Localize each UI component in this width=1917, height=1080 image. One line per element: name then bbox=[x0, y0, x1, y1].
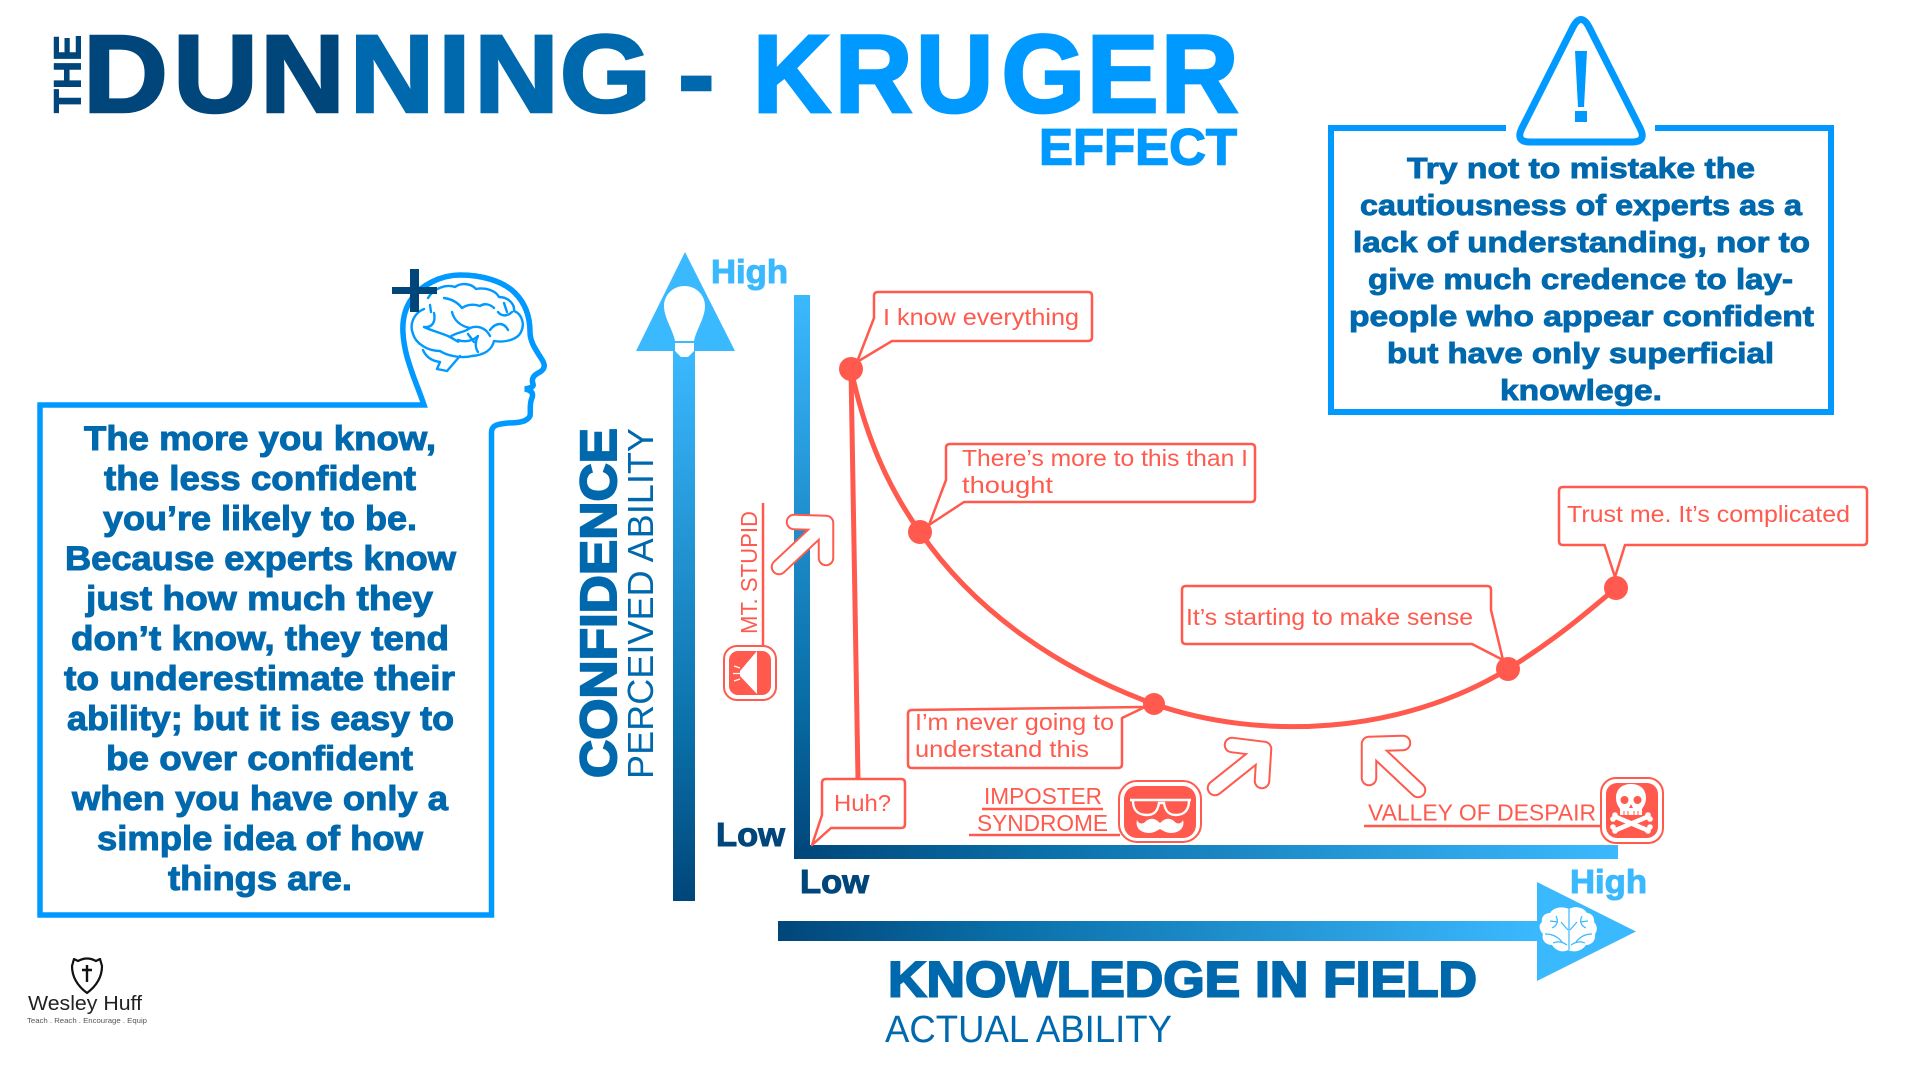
panel: warning note bbox=[1331, 20, 1831, 412]
title: DUNNING: DUN bbox=[83, 14, 345, 136]
icon: light bulb bbox=[664, 286, 705, 357]
label: IMPOSTER SYNDROME: IMPOSTER bbox=[984, 783, 1102, 809]
text: know less confident: be over confident bbox=[106, 740, 413, 778]
arrow: toward imposter syndrome bbox=[1215, 745, 1264, 788]
icon: megaphone bbox=[724, 646, 776, 700]
point: never going to understand bbox=[1143, 693, 1165, 715]
text: know less confident: things are. bbox=[168, 860, 352, 898]
icon: shield with cross bbox=[72, 958, 102, 993]
text: know less confident: you’re likely to be. bbox=[103, 500, 417, 538]
chart: Dunning-Kruger curve bbox=[724, 292, 1867, 859]
text: know less confident: ability; but it is easy to bbox=[67, 700, 454, 738]
icon: glasses and moustache bbox=[1119, 781, 1201, 842]
callout: never going to understand bbox=[908, 707, 1145, 768]
callout: Huh? bbox=[812, 779, 905, 845]
title: THE: THE bbox=[48, 35, 90, 113]
callout: There's more to this: thought bbox=[962, 472, 1054, 498]
callout: starting to make sense: It’s starting to make sense bbox=[1186, 604, 1473, 630]
title: EFFECT: EFFECT bbox=[1039, 118, 1237, 176]
text: warning message: Try not to mistake the bbox=[1407, 153, 1755, 185]
heading: CONFIDENCE: CONFIDENCE bbox=[570, 428, 627, 778]
text: know less confident: Because experts know bbox=[65, 540, 457, 578]
x-axis knowledge arrow bbox=[778, 882, 1636, 981]
callout: Trust me bbox=[1559, 487, 1867, 577]
callout: I know everything: I know everything bbox=[883, 304, 1079, 330]
subheading: PERCEIVED ABILITY: PERCEIVED ABILITY bbox=[620, 428, 661, 779]
label: High confidence: High bbox=[711, 253, 788, 290]
title: KRUGER: KRUGER bbox=[753, 13, 1239, 136]
point: starting to make sense bbox=[1496, 657, 1520, 681]
chart axis: vertical bbox=[794, 295, 810, 859]
text: warning message: but have only superficial bbox=[1387, 338, 1774, 370]
panel: head-shaped knowledge box bbox=[40, 269, 544, 915]
logo tagline: Teach . Reach . Encourage . Equip bbox=[27, 1016, 147, 1025]
text: know less confident: when you have only a bbox=[71, 780, 449, 818]
chart axis: horizontal bbox=[794, 845, 1618, 859]
heading: KNOWLEDGE IN FIELD: KNOWLEDGE IN FIELD bbox=[888, 952, 1477, 1008]
point: decline bbox=[908, 520, 932, 544]
callout: I know everything bbox=[857, 292, 1092, 362]
point: peak bbox=[839, 357, 863, 381]
text: know less confident: The more you know, bbox=[84, 420, 436, 458]
title: dash: - bbox=[678, 13, 715, 136]
panel outline with head silhouette bbox=[40, 275, 544, 915]
text: know less confident: the less confident bbox=[104, 460, 416, 498]
callout: starting to make sense bbox=[1182, 586, 1503, 660]
label: High knowledge: High bbox=[1570, 863, 1647, 900]
label: Low knowledge: Low bbox=[800, 863, 869, 900]
text: know less confident: simple idea of how bbox=[97, 820, 424, 858]
callout: never going to understand: understand this bbox=[915, 736, 1089, 762]
subheading: ACTUAL ABILITY: ACTUAL ABILITY bbox=[885, 1009, 1172, 1051]
label: IMPOSTER SYNDROME: SYNDROME bbox=[977, 810, 1108, 836]
label: VALLEY OF DESPAIR: VALLEY OF DESPAIR bbox=[1368, 800, 1596, 826]
text: warning message bbox=[1349, 153, 1814, 407]
arrow head bbox=[636, 252, 735, 351]
text: warning message: lack of understanding, nor to bbox=[1353, 227, 1810, 259]
warning box outline bbox=[1331, 128, 1831, 412]
arrow shaft bbox=[778, 921, 1538, 941]
label: MT. STUPID: MT. STUPID bbox=[736, 511, 762, 634]
text: warning message: people who appear confident bbox=[1349, 301, 1814, 333]
icon: plus sign bbox=[392, 269, 437, 312]
curve line bbox=[851, 369, 1616, 727]
callout: There's more to this bbox=[929, 444, 1255, 525]
callout: Huh?: Huh? bbox=[834, 790, 891, 816]
title bbox=[48, 13, 1239, 176]
callout: Trust me: Trust me. It’s complicated bbox=[1567, 501, 1850, 527]
text: warning message: give much credence to lay- bbox=[1368, 264, 1793, 296]
arrow head bbox=[1537, 882, 1636, 981]
text: know less confident bbox=[64, 420, 457, 898]
icon: brain in head bbox=[412, 284, 523, 371]
text: know less confident: to underestimate their bbox=[64, 660, 455, 698]
logo name: Wesley Huff bbox=[28, 993, 142, 1015]
text: know less confident: don’t know, they tend bbox=[71, 620, 449, 658]
rising line from Huh bbox=[851, 369, 858, 779]
icon: warning triangle bbox=[1520, 20, 1642, 142]
label: Low confidence: Low bbox=[716, 816, 785, 853]
arrow: toward Mt. Stupid bbox=[779, 522, 826, 567]
text: warning message: knowlege. bbox=[1500, 375, 1662, 407]
callout: There's more to this: There’s more to this than I bbox=[962, 445, 1248, 471]
y-axis confidence arrow bbox=[636, 252, 735, 901]
label: IMPOSTER SYNDROME bbox=[969, 783, 1120, 836]
title: DUNNING: NING bbox=[350, 14, 651, 136]
callout: never going to understand: I’m never going to bbox=[915, 709, 1114, 735]
logo: Wesley Huff bbox=[27, 958, 147, 1025]
arrow shaft bbox=[673, 351, 695, 901]
icon: skull and crossbones bbox=[1601, 778, 1663, 843]
icon: brain bbox=[1540, 907, 1597, 951]
text: know less confident: just how much they bbox=[85, 580, 433, 618]
text: warning message: cautiousness of experts as a bbox=[1360, 190, 1803, 222]
arrow: toward valley of despair bbox=[1369, 743, 1418, 790]
point: complicated bbox=[1604, 576, 1628, 600]
